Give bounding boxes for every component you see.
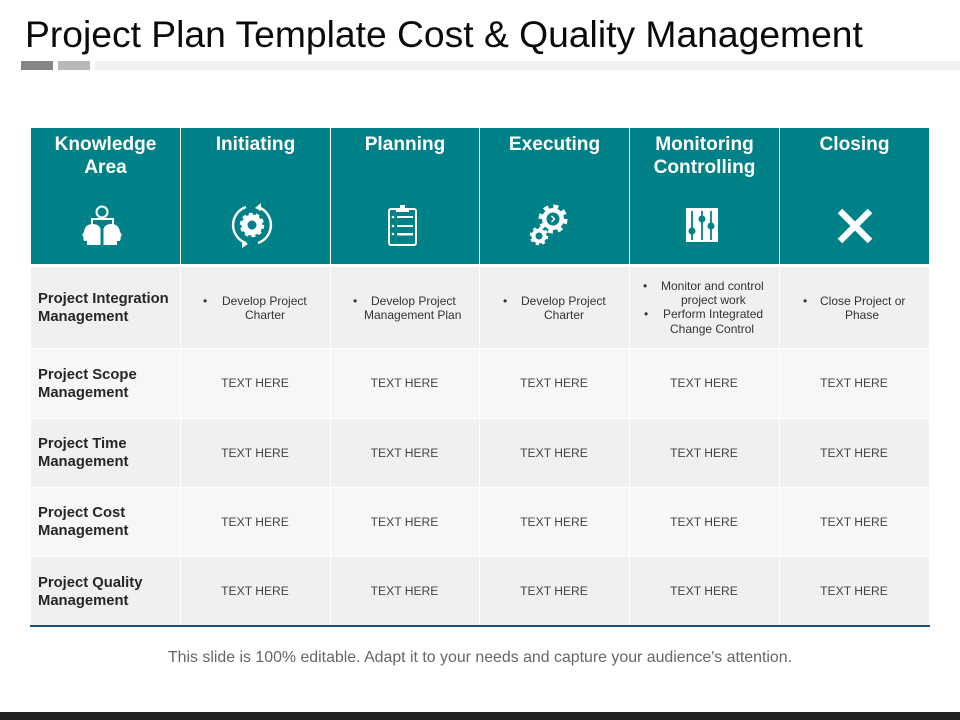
row label: Management bbox=[38, 385, 128, 401]
cell: monitoring: Perform Integrated bbox=[663, 307, 763, 321]
row: Project Cost Management bbox=[38, 505, 888, 539]
cell: initiating: Develop Project bbox=[222, 294, 307, 308]
header: Knowledge Area: Area bbox=[84, 157, 127, 178]
cell: initiating: Charter bbox=[245, 308, 285, 322]
row label: Management bbox=[38, 593, 128, 609]
row label: Management bbox=[38, 454, 128, 470]
icon: two heads with light bulb bbox=[82, 206, 122, 245]
cell: monitoring: Change Control bbox=[670, 322, 754, 336]
header: Monitoring Controlling bbox=[630, 128, 779, 264]
row label: Project Time bbox=[38, 436, 127, 452]
cell: executing: • bbox=[503, 294, 507, 308]
text cells: TEXT HERE bbox=[371, 515, 438, 529]
row: Project Integration Management bbox=[31, 267, 929, 348]
cell: initiating: • bbox=[203, 294, 207, 308]
cell: planning: Management Plan bbox=[364, 308, 461, 322]
row label bbox=[31, 488, 180, 556]
title accent bar bbox=[21, 61, 960, 70]
footer note: This slide is 100% editable. Adapt it to your needs and capture your audience's attention. bbox=[168, 649, 792, 666]
text cells: TEXT HERE bbox=[520, 584, 588, 598]
cell: planning: Develop Project bbox=[371, 294, 456, 308]
cell: monitoring: Monitor and control bbox=[661, 279, 764, 293]
text cells: TEXT HERE bbox=[221, 584, 289, 598]
header: Initiating bbox=[181, 128, 330, 264]
header: Monitoring Controlling: Monitoring bbox=[655, 134, 754, 155]
text cells: TEXT HERE bbox=[520, 376, 588, 390]
text cells bbox=[181, 557, 929, 625]
cell: monitoring bbox=[630, 267, 779, 348]
row label: Management bbox=[38, 309, 128, 325]
header: Closing bbox=[780, 128, 929, 264]
cell: planning bbox=[331, 267, 479, 348]
icon: cross bbox=[838, 208, 872, 244]
text cells bbox=[221, 376, 888, 390]
cell: closing: Close Project or bbox=[820, 294, 905, 308]
cell: closing: • bbox=[803, 294, 807, 308]
header: Closing: Closing bbox=[819, 134, 890, 155]
cell: monitoring: project work bbox=[681, 293, 746, 307]
cell: executing: Charter bbox=[544, 308, 584, 322]
cell: planning: • bbox=[353, 294, 357, 308]
header: Monitoring Controlling: Controlling bbox=[654, 157, 755, 178]
text cells: TEXT HERE bbox=[820, 446, 888, 460]
header: Initiating: Initiating bbox=[216, 134, 295, 155]
text cells: TEXT HERE bbox=[820, 376, 888, 390]
row label: Project Scope bbox=[38, 367, 137, 383]
cell: executing bbox=[480, 267, 629, 348]
icon: two gears bbox=[530, 204, 568, 246]
row: Project Quality Management bbox=[31, 557, 929, 625]
text cells: TEXT HERE bbox=[371, 376, 438, 390]
row: Project Scope Management bbox=[38, 367, 888, 401]
text cells: TEXT HERE bbox=[371, 446, 438, 460]
text cells: TEXT HERE bbox=[820, 584, 888, 598]
cell: monitoring: • bbox=[644, 307, 648, 321]
text cells bbox=[181, 419, 929, 487]
text cells: TEXT HERE bbox=[520, 446, 588, 460]
text cells: TEXT HERE bbox=[670, 446, 738, 460]
header: Planning: Planning bbox=[365, 134, 445, 155]
row label: Project Cost bbox=[38, 505, 125, 521]
cell: closing: Phase bbox=[845, 308, 879, 322]
row label: Project Integration bbox=[38, 291, 169, 307]
text cells: TEXT HERE bbox=[670, 584, 738, 598]
cell: monitoring: • bbox=[643, 279, 647, 293]
icon: gear with circular arrows bbox=[232, 203, 272, 248]
row label: Management bbox=[38, 523, 128, 539]
icon: clipboard checklist bbox=[388, 205, 417, 246]
header: Executing bbox=[480, 128, 629, 264]
icon: sliders bbox=[686, 208, 718, 242]
text cells: TEXT HERE bbox=[221, 515, 289, 529]
header: Knowledge Area bbox=[31, 128, 180, 264]
header: Knowledge Area: Knowledge bbox=[55, 134, 156, 155]
header: Planning bbox=[331, 128, 479, 264]
header: Executing: Executing bbox=[509, 134, 600, 155]
row label bbox=[31, 349, 180, 418]
text cells: TEXT HERE bbox=[520, 515, 588, 529]
text cells: TEXT HERE bbox=[221, 376, 289, 390]
text cells: TEXT HERE bbox=[670, 376, 738, 390]
row label: Project Quality bbox=[38, 575, 142, 591]
row: Project Time Management bbox=[31, 419, 929, 487]
row label bbox=[31, 557, 180, 625]
text cells: TEXT HERE bbox=[670, 515, 738, 529]
text cells: TEXT HERE bbox=[820, 515, 888, 529]
title: Project Plan Template Cost & Quality Management bbox=[25, 13, 863, 55]
text cells bbox=[221, 515, 888, 529]
cell: closing bbox=[780, 267, 929, 348]
text cells: TEXT HERE bbox=[221, 446, 289, 460]
text cells: TEXT HERE bbox=[371, 584, 438, 598]
row label bbox=[31, 267, 180, 348]
cell: executing: Develop Project bbox=[521, 294, 606, 308]
row label bbox=[31, 419, 180, 487]
cell: initiating bbox=[181, 267, 330, 348]
